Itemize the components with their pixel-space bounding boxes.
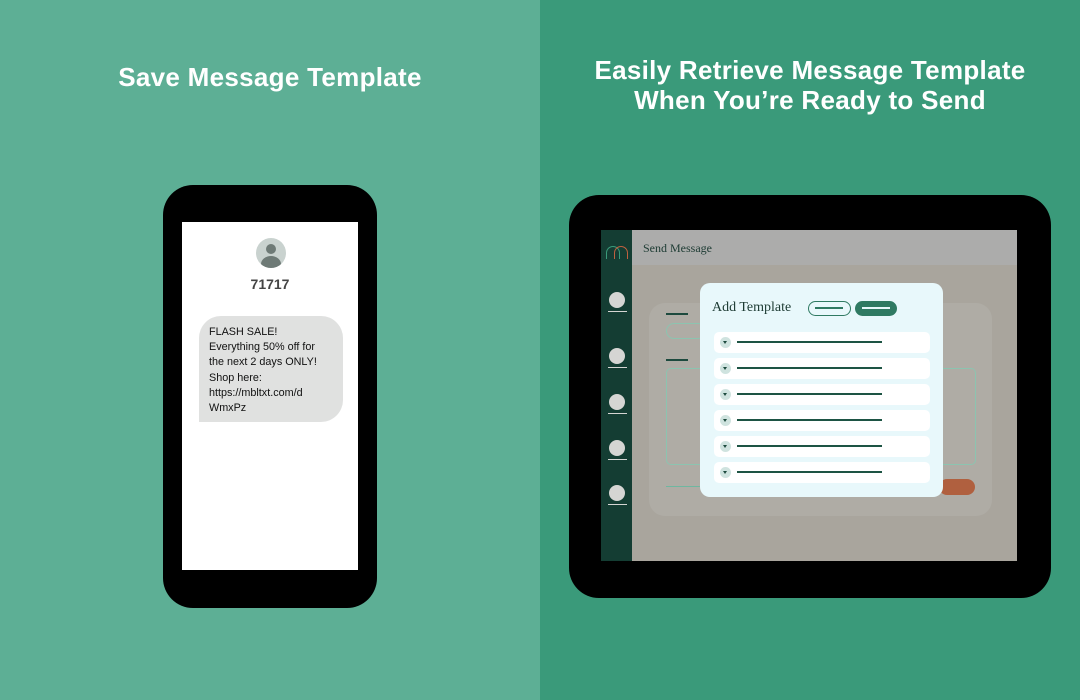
message bubble: Everything 50% off for — [209, 341, 315, 353]
title: save message template: Save Message Template — [118, 62, 422, 92]
tablet — [569, 195, 1051, 598]
phone — [163, 185, 377, 608]
message bubble: FLASH SALE! — [209, 326, 277, 338]
left panel background — [0, 0, 540, 700]
icon: avatar — [256, 238, 286, 268]
template list — [714, 332, 930, 483]
phone screen — [182, 222, 358, 570]
message bubble: WmxPz — [209, 402, 246, 414]
modal: add template — [700, 283, 943, 497]
background form card — [649, 303, 992, 516]
sidebar — [601, 230, 632, 561]
message bubble: the next 2 days ONLY! — [209, 356, 317, 368]
message bubble — [199, 316, 343, 422]
title: easily retrieve: When You’re Ready to Send — [634, 85, 986, 115]
modal heading: Add Template — [712, 300, 791, 315]
message bubble: Shop here: — [209, 372, 262, 384]
right panel background — [540, 0, 1080, 700]
title: easily retrieve — [594, 55, 1026, 115]
icon: logo — [606, 246, 628, 259]
buttons — [808, 301, 851, 316]
contact number: 71717 — [251, 276, 289, 292]
header: send message — [632, 230, 1017, 265]
message bubble: https://mbltxt.com/d — [209, 387, 303, 399]
tablet screen — [601, 230, 1017, 561]
header: send message: Send Message — [643, 241, 712, 255]
title: easily retrieve: Easily Retrieve Message Template — [594, 55, 1026, 85]
